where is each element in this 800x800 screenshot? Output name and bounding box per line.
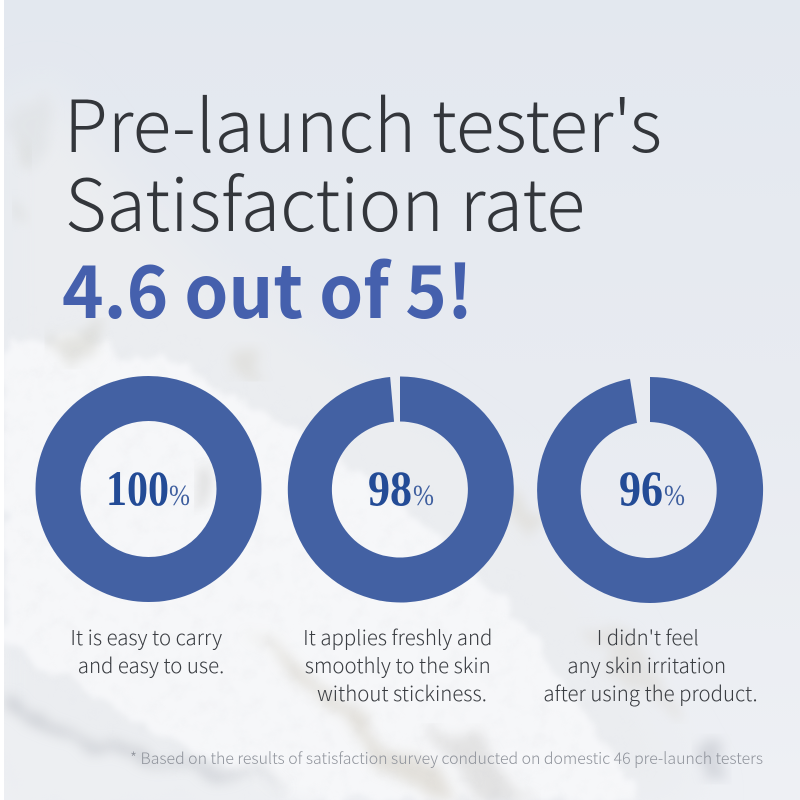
value 98%: 98 [368,460,412,516]
caption: It applies freshly and [303,621,492,651]
donut chart 96% [537,377,763,603]
caption: and easy to use. [78,649,224,679]
value 98%: % [413,479,434,512]
panel: 100% easy to carry [58,398,239,679]
caption: after using the product. [543,677,758,707]
panel: 96% no irritation [537,377,763,707]
heading line 1: Pre-launch tester's [64,68,662,173]
panel: 98% applies freshly [288,376,514,707]
value 100%: 100 [106,460,169,516]
donut chart 100% [58,398,239,580]
value 100%: % [169,479,190,512]
value 96%: % [664,479,685,512]
caption: without stickiness. [317,677,487,707]
heading line 2: Satisfaction rate [65,147,585,252]
value 96%: 96 [619,460,663,516]
donut chart 98% [288,376,514,602]
caption: I didn't feel [597,621,699,651]
caption: smoothly to the skin [305,649,491,679]
caption: It is easy to carry [70,621,222,651]
caption: any skin irritation [567,649,726,679]
heading line 3: rating: 4.6 out of 5! [62,234,473,340]
title [62,68,662,340]
footnote: * Based on the results of satisfaction survey conducted on domestic 46 pre-launch testers [130,745,763,769]
